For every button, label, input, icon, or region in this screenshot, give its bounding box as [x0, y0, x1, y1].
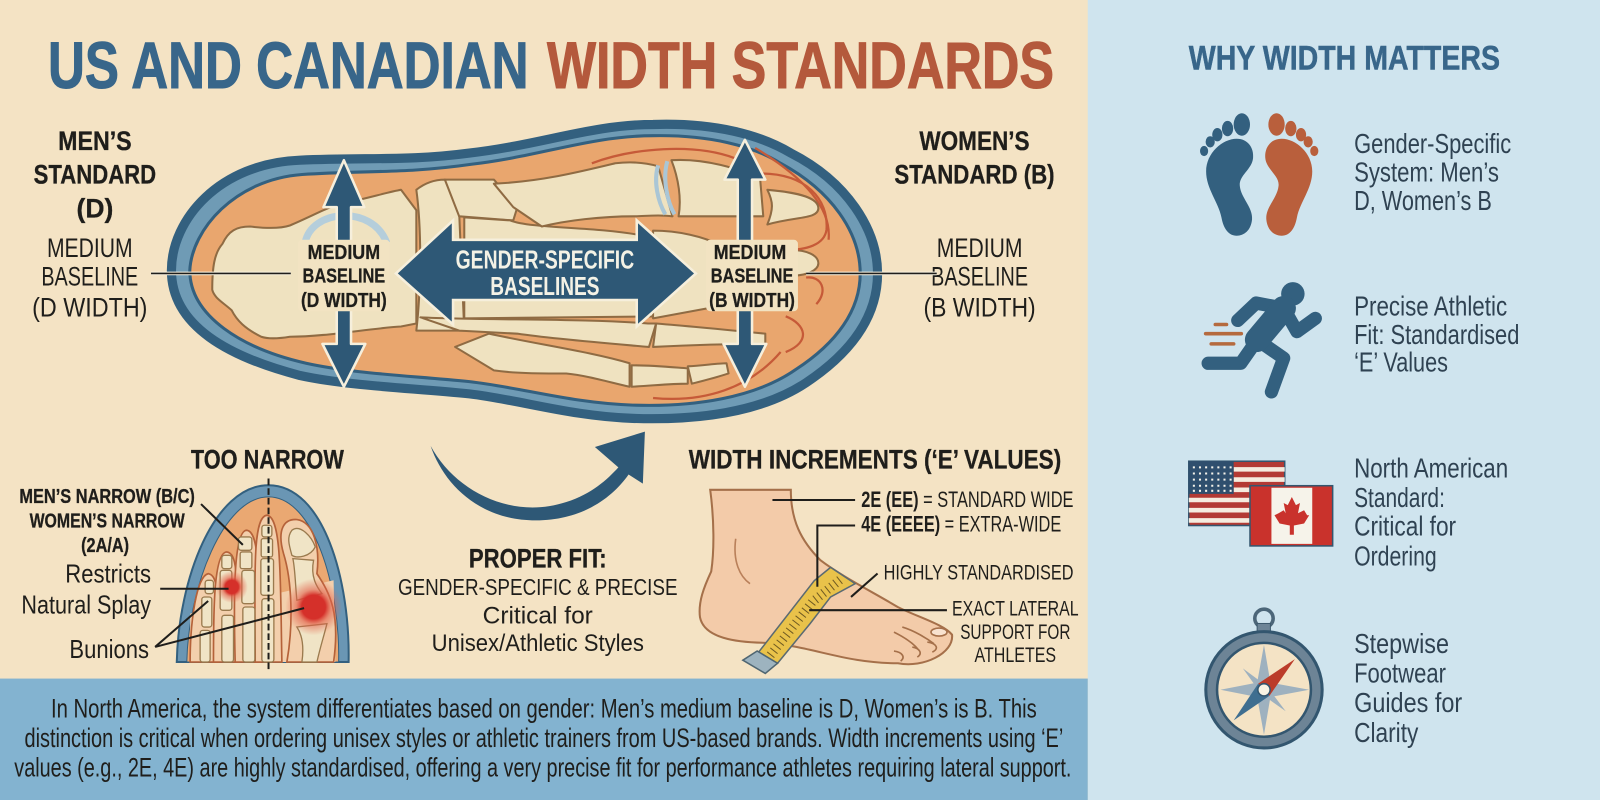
text: stepwise footwear guides: Clarity [1354, 717, 1419, 748]
text: north american standard: North American [1354, 453, 1508, 484]
panel: men's standard label: MEDIUM [47, 233, 133, 263]
heel and tarsal bones [212, 180, 663, 338]
left vertical arrow [322, 160, 365, 387]
red toe outlines [760, 173, 827, 352]
panel: women's standard label: WOMEN’S [919, 126, 1030, 156]
label: medium baseline B: BASELINE [711, 266, 793, 288]
text: proper fit: PROPER FIT: [469, 543, 607, 573]
heading: TOO NARROW [191, 444, 344, 474]
text: gender-specific system [1354, 128, 1511, 216]
panel: women's standard label [894, 126, 1055, 322]
foot anatomy diagram [151, 124, 937, 419]
icon: runner [1206, 282, 1315, 392]
central double arrow: BASELINES [490, 273, 599, 301]
labels [861, 487, 1079, 667]
panel: men's standard label: (D) [76, 193, 113, 223]
panel: why width matters background [1088, 0, 1600, 800]
dashed centre line [266, 479, 272, 670]
label: medium baseline B [706, 240, 798, 312]
labels [19, 486, 195, 664]
labels: HIGHLY STANDARDISED [884, 561, 1073, 585]
labels: MEN’S NARROW (B/C) [19, 486, 195, 508]
labels: (2A/A) [81, 535, 129, 557]
text: precise athletic fit: Fit: Standardised [1354, 319, 1519, 350]
panel: bottom summary [0, 679, 1088, 800]
label: medium baseline D: MEDIUM [308, 242, 380, 264]
labels: Bunions [69, 636, 149, 664]
text: precise athletic fit: Precise Athletic [1354, 290, 1507, 321]
text: precise athletic fit: ‘E’ Values [1354, 346, 1448, 377]
labels: SUPPORT FOR [960, 620, 1070, 644]
panel: width increments [689, 444, 1079, 673]
central double arrow: GENDER-SPECIFIC [456, 246, 634, 274]
text: proper fit: GENDER-SPECIFIC & PRECISE [398, 574, 678, 600]
panel: women's standard label: BASELINE [931, 262, 1028, 292]
text: north american standard: Critical for [1354, 511, 1456, 542]
labels: WOMEN’S NARROW [30, 511, 185, 533]
text: stepwise footwear guides: Footwear [1354, 658, 1446, 689]
label: medium baseline D: BASELINE [303, 266, 385, 288]
right vertical arrow [723, 140, 766, 387]
toe bones [200, 525, 327, 662]
panel: men's standard label: MEN’S [58, 126, 132, 156]
text: proper fit: Critical for [483, 602, 593, 629]
text: stepwise footwear guides [1354, 628, 1462, 748]
leader line men's [151, 272, 291, 275]
metatarsal and toe bones [420, 160, 818, 387]
heading: WIDTH INCREMENTS (‘E’ VALUES) [689, 444, 1061, 474]
US flag [1189, 461, 1285, 526]
panel: women's standard label: STANDARD (B) [894, 160, 1055, 190]
shoe outline [171, 124, 878, 419]
measuring tape [743, 567, 855, 673]
text: stepwise footwear guides: Guides for [1354, 687, 1462, 718]
title [48, 29, 1054, 103]
red tendons [592, 148, 829, 399]
title: WIDTH STANDARDS [547, 29, 1054, 103]
panel: men's standard label: STANDARD [34, 160, 156, 190]
text: north american standard: Standard: [1354, 482, 1445, 513]
labels: Natural Splay [21, 591, 151, 619]
label: medium baseline B: (B WIDTH) [709, 290, 795, 312]
label: medium baseline B: MEDIUM [714, 242, 786, 264]
leader line women's [806, 272, 937, 275]
panel: men's standard label: BASELINE [41, 262, 138, 292]
Canadian flag [1250, 486, 1333, 546]
text: north american standard [1354, 453, 1508, 571]
text: proper fit [398, 543, 678, 657]
panel: bottom summary: distinction is critical when ordering unisex styles or athletic trainers from US-based brands. Width increments using ‘E’ [24, 723, 1063, 753]
labels: 2E (EE) = STANDARD WIDE [861, 487, 1073, 512]
inner sole [190, 136, 860, 405]
text: gender-specific system: System: Men’s [1354, 157, 1499, 188]
labels: 4E (EEEE) = EXTRA-WIDE [861, 512, 1061, 537]
title: US AND CANADIAN [48, 29, 529, 103]
panel: men's standard label: (D WIDTH) [32, 292, 147, 322]
central double arrow [396, 220, 696, 327]
panel: bottom summary: In North America, the system differentiates based on gender: Men’s medium baseline is D, Women’s is B. This [51, 693, 1037, 723]
narrow foot illustration [177, 479, 349, 670]
label: medium baseline D [298, 240, 390, 312]
text: stepwise footwear guides: Stepwise [1354, 628, 1449, 659]
labels: EXACT LATERAL [952, 596, 1079, 620]
icon: US and Canadian flags [1189, 461, 1333, 546]
label: medium baseline D: (D WIDTH) [301, 290, 387, 312]
foot illustration [700, 490, 952, 673]
labels: Restricts [65, 561, 151, 589]
panel: women's standard label: (B WIDTH) [923, 292, 1036, 322]
panel: men's standard label [32, 126, 156, 322]
icon: footprints [1200, 113, 1318, 236]
blue cartilage arc [305, 216, 387, 243]
panel: bottom summary: values (e.g., 2E, 4E) are highly standardised, offering a very precise fit for performance athletes requiring lateral support. [14, 753, 1071, 783]
panel: women's standard label: MEDIUM [937, 233, 1022, 263]
text: proper fit: Unisex/Athletic Styles [432, 630, 644, 657]
leader lines [772, 500, 947, 610]
leader lines [155, 504, 304, 647]
text: gender-specific system: Gender-Specific [1354, 128, 1511, 159]
icon: compass [1206, 609, 1322, 748]
text: precise athletic fit [1354, 290, 1519, 377]
panel: too narrow [19, 444, 349, 670]
text: gender-specific system: D, Women’s B [1354, 185, 1492, 216]
heading: why width matters: WHY WIDTH MATTERS [1189, 39, 1500, 77]
bunion red highlights [285, 579, 342, 635]
text: north american standard: Ordering [1354, 540, 1437, 571]
curved arrow [431, 432, 645, 520]
labels: ATHLETES [974, 643, 1056, 667]
